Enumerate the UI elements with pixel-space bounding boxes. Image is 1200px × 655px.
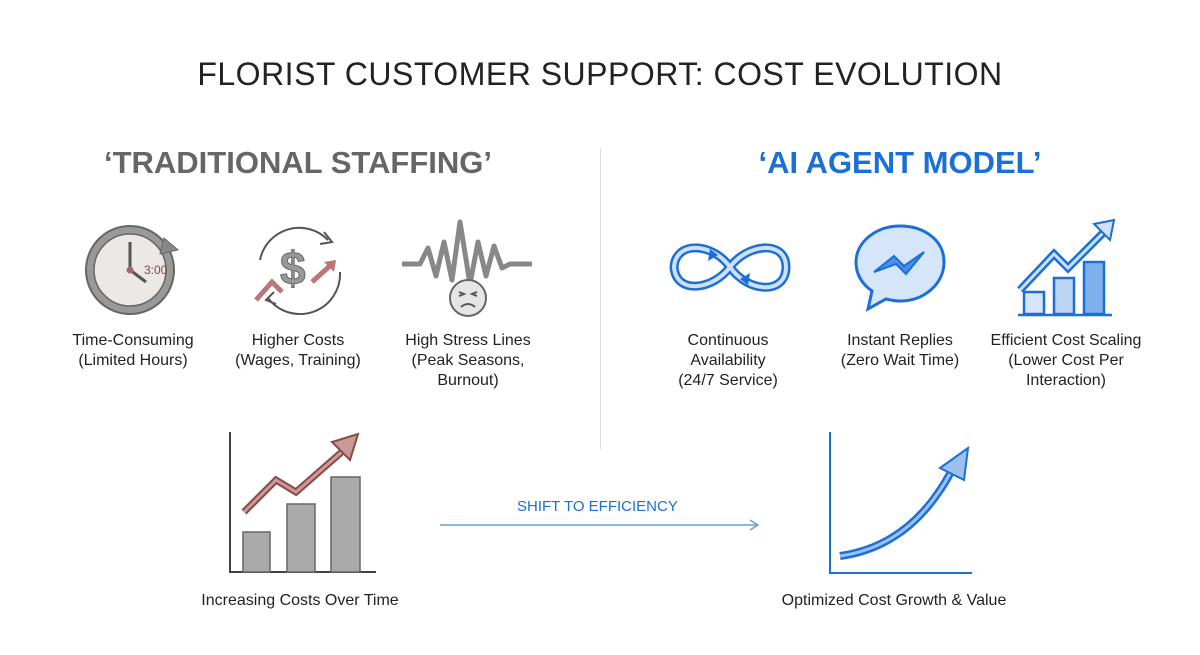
label: high stress [405, 332, 531, 389]
label: continuous availability [678, 332, 778, 389]
icon: clock [85, 225, 179, 315]
label: higher costs: Higher Costs [252, 332, 344, 349]
label: continuous availability: Continuous [688, 332, 768, 349]
icon: stress wave [402, 220, 532, 317]
label: efficient scaling: (Lower Cost Per [1008, 352, 1124, 369]
label: high stress: Burnout) [437, 372, 499, 389]
icon: dollar cycle [254, 226, 342, 315]
heading: traditional staffing: ‘TRADITIONAL STAFFING’ [104, 145, 492, 180]
label: time-consuming [72, 332, 194, 369]
label: efficient scaling: Efficient Cost Scaling [991, 332, 1141, 349]
label: instant replies [841, 332, 959, 369]
chart: increasing costs [229, 432, 376, 573]
title: FLORIST CUSTOMER SUPPORT: COST EVOLUTION [197, 56, 1003, 92]
label: higher costs [235, 332, 361, 369]
label: efficient scaling [991, 332, 1141, 389]
arrow: shift to efficiency [440, 498, 760, 531]
label: continuous availability: (24/7 Service) [678, 372, 778, 389]
arrow: shift to efficiency: SHIFT TO EFFICIENCY [517, 498, 678, 515]
heading: ai agent model: ‘AI AGENT MODEL’ [758, 145, 1042, 180]
label: instant replies: Instant Replies [847, 332, 953, 349]
label: increasing costs: Increasing Costs Over Time [201, 592, 399, 609]
icon: dollar cycle: $ [280, 242, 306, 294]
label: higher costs: (Wages, Training) [235, 352, 361, 369]
label: high stress: High Stress Lines [405, 332, 531, 349]
label: high stress: (Peak Seasons, [412, 352, 524, 369]
icon: clock: 3:00 [144, 263, 168, 277]
label: time-consuming: Time-Consuming [72, 332, 194, 349]
label: continuous availability: Availability [690, 352, 766, 369]
icon: growth chart [1017, 218, 1116, 316]
label: efficient scaling: Interaction) [1026, 372, 1106, 389]
chart: optimized growth [829, 432, 972, 574]
label: optimized growth: Optimized Cost Growth & Value [782, 592, 1006, 609]
label: time-consuming: (Limited Hours) [78, 352, 188, 369]
icon: chat bubble [854, 224, 946, 312]
icon: infinity [670, 243, 790, 292]
label: instant replies: (Zero Wait Time) [841, 352, 959, 369]
